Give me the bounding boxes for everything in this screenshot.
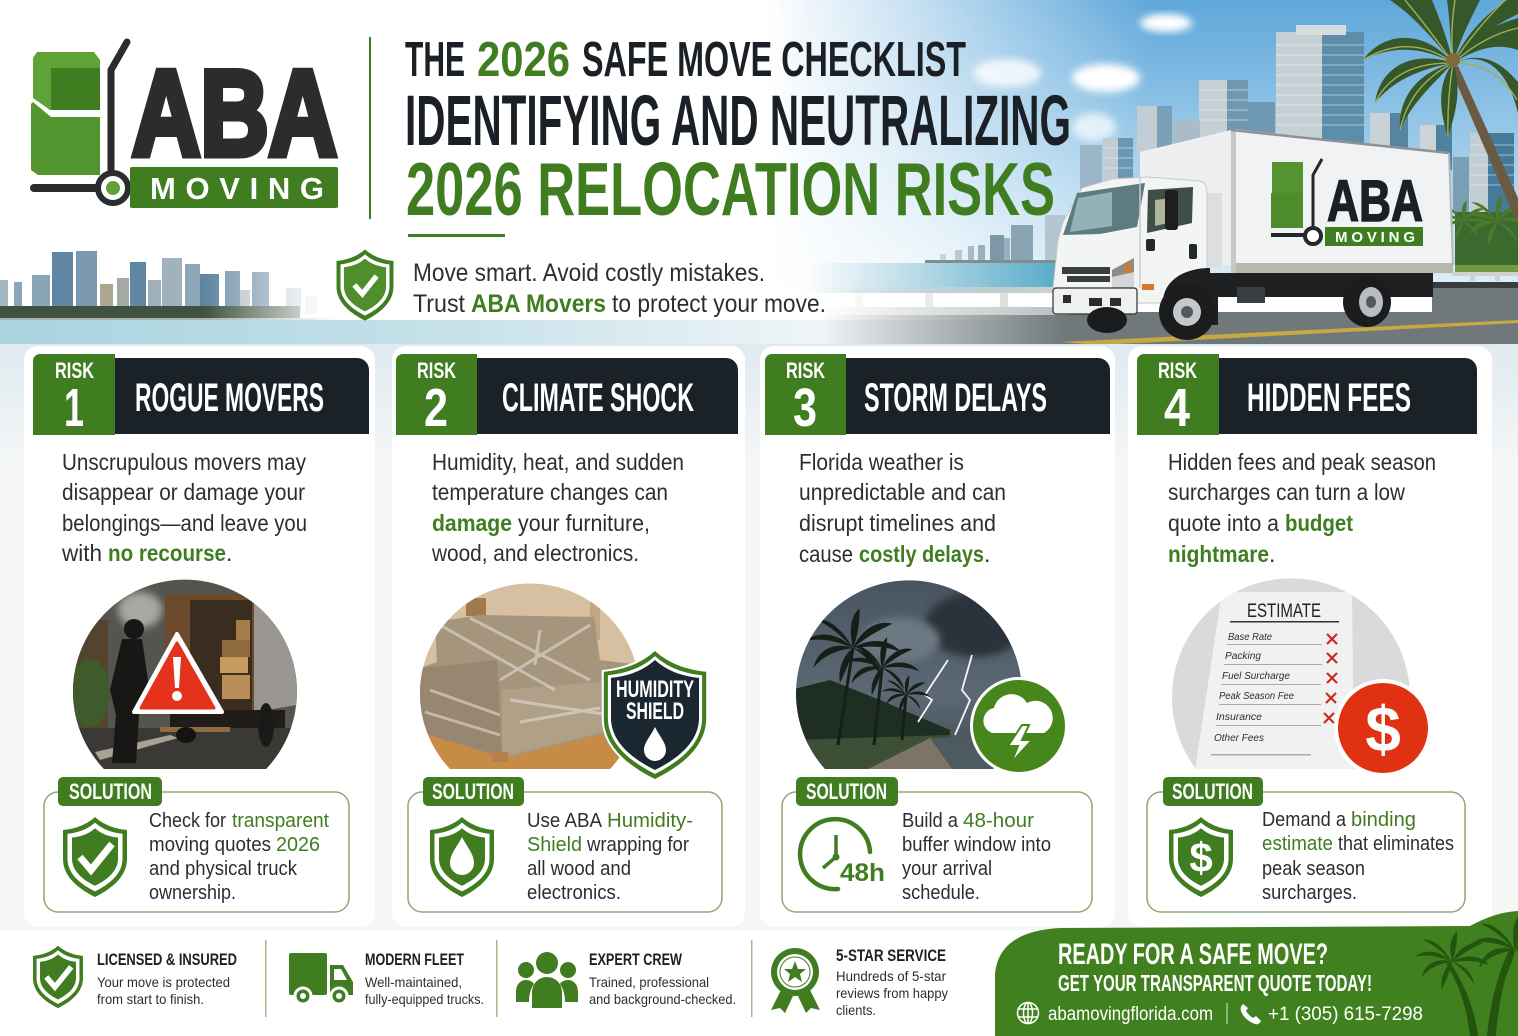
risk 2 description: damage [432,510,512,536]
icon: 48h clock: 48h [840,859,885,887]
risk 2 header bar: RISK [417,358,456,383]
risk 2 solution [408,777,722,912]
logo: green boxes [31,52,100,175]
moving truck with ABA logo [1053,129,1453,340]
title line 1: THE [405,33,465,87]
truck logo [1271,159,1423,246]
risk 3 description: disrupt timelines and [799,510,996,536]
icon: 48h clock [800,819,885,889]
trust bar dividers [265,940,752,1017]
risk 2 solution: electronics. [527,882,621,904]
trust item: five star service: Hundreds of 5-star [836,968,946,984]
risk 4 solution: that eliminates [1338,833,1454,855]
risk 3 description: costly delays [859,541,984,567]
risk 4 header bar [1137,354,1477,438]
risk 1 header bar: RISK [55,358,94,383]
image: estimate sheet with hidden fees [1165,575,1432,777]
risk 4 description: . [1269,541,1275,567]
risk 1 solution: Check for [149,810,226,832]
tagline text: to protect your move. [612,290,826,318]
phone number: +1 (305) 615-7298 [1268,1004,1423,1025]
risk 1 header bar [33,354,369,438]
risk 1 description: no recourse [108,540,226,566]
logo: hand truck [34,42,128,203]
contact divider [1226,1003,1228,1024]
icon: water drop shield [430,817,494,897]
risk 4 description: nightmare [1168,541,1269,567]
image: estimate sheet with hidden fees: Insurance [1216,711,1262,723]
icon: storm cloud badge [970,677,1068,775]
risk 1 description: belongings—and leave you [62,510,307,536]
risk 4 header bar: RISK [1158,358,1197,383]
humidity shield badge: HUMIDITY [616,676,694,703]
logo: ABA wordmark: ABA [132,45,337,181]
icon: check shield [63,817,127,897]
trust item: five star service: clients. [836,1002,876,1018]
risk 2 description: your furniture, [518,510,650,536]
risk 2 solution: Shield [527,834,582,856]
image: estimate sheet with hidden fees: Peak Season Fee [1219,690,1294,702]
panel: risk 2 climate shock [392,346,745,927]
risk 2 solution: wrapping for [586,834,689,856]
risk 4 description: surcharges can turn a low [1168,479,1405,505]
risk 1 description [61,449,307,566]
risk 1 description: Unscrupulous movers may [62,449,306,475]
risk 3 solution: schedule. [902,882,980,904]
road, guard rail and right side scenery [820,195,1518,345]
trust item: five star service: reviews from happy [836,985,948,1001]
risk 4 header bar: HIDDEN FEES [1247,376,1411,420]
risk 1 solution: 2026 [276,834,320,856]
trust item: expert crew [516,950,736,1008]
risk 3 description: unpredictable and can [799,479,1006,505]
ABA Moving logo [31,42,338,208]
footer white band [0,930,1518,1036]
risk 2 header bar [396,354,738,438]
icon: check shield [337,249,393,321]
risk 3 solution: buffer window into [902,834,1051,856]
image: estimate sheet with hidden fees: Fuel Surcharge [1222,670,1290,682]
risk 4 description: budget [1285,510,1353,536]
trust item: five star service: 5-STAR SERVICE [836,946,946,965]
title block [405,33,1071,237]
trust item: licensed and insured: LICENSED & INSURED [97,950,237,969]
risk 4 solution: estimate [1262,833,1333,855]
risk 2 solution: Use ABA [527,810,603,832]
trust item: modern fleet: Well-maintained, [365,974,462,990]
truck cargo box [1140,129,1453,303]
risk 3 header bar: STORM DELAYS [864,376,1047,420]
risk 3 description: cause [799,541,853,567]
trust item: licensed and insured [33,946,237,1008]
risk 3 description: . [984,541,990,567]
truck cab [1053,177,1218,325]
tagline with shield icon [337,249,826,321]
icon: warning triangle [134,634,222,712]
icon: globe [1018,1002,1038,1024]
image: movers truck at night with warning [73,580,297,769]
title line 1 [405,33,966,87]
image: wrapped sofa [420,584,636,769]
trust bar [33,946,948,1018]
call to action panel [995,911,1518,1036]
tagline text [413,259,826,318]
risk 1 solution: SOLUTION [69,779,152,804]
icon: dollar shield: $ [1189,834,1213,881]
panel: risk 3 storm delays [760,346,1115,927]
title line 3: 2026 RELOCATION RISKS [406,147,1055,231]
tagline text: Trust [413,290,465,318]
risk 2 solution: Humidity- [607,810,693,832]
title underline [408,234,505,237]
risk 3 header bar: 3 [793,378,817,438]
risk 2 description [431,449,684,566]
left skyline over the water [0,251,340,322]
truck logo: ABA [1327,169,1423,234]
trust item: expert crew: and background-checked. [589,991,736,1007]
risk 2 solution: all wood and [527,858,631,880]
risk 4 description [1168,449,1436,567]
risk 3 solution: 48-hour [963,810,1034,832]
image: estimate sheet with hidden fees: ESTIMATE [1247,601,1321,622]
risk 4 solution: binding [1351,809,1416,831]
risk 3 solution: Build a [902,810,959,832]
trust item: modern fleet: fully-equipped trucks. [365,991,484,1007]
water strip along the header bottom [0,320,1518,344]
risk 2 description: temperature changes can [432,479,668,505]
risk 2 header bar: CLIMATE SHOCK [502,376,694,420]
image: hurricane storm and palms [790,578,1030,773]
risk 3 description [799,449,1006,567]
risk 4 solution: peak season [1262,858,1365,880]
icon: red dollar badge [1334,679,1432,777]
man silhouette [110,619,148,763]
image: estimate sheet with hidden fees: Base Rate [1228,631,1272,643]
trust item: modern fleet: MODERN FLEET [365,950,464,969]
trust item: expert crew: Trained, professional [589,974,709,990]
risk 4 solution: Demand a [1262,809,1347,831]
risk 3 solution: your arrival [902,858,992,880]
risk 3 description: Florida weather is [799,449,964,475]
logo: MOVING banner: MOVING [150,171,324,206]
palm silhouettes [1415,914,1518,1036]
trust item: licensed and insured: Your move is protected [97,974,230,990]
panel: risk 1 rogue movers [24,346,375,927]
risk 1 description: . [226,540,232,566]
risk 4 solution: SOLUTION [1172,779,1253,804]
risk 1 solution: and physical truck [149,858,298,880]
website: abamovingflorida.com [1048,1004,1213,1025]
risk 1 header bar: 1 [64,378,84,438]
risk 1 header bar: ROGUE MOVERS [135,376,324,420]
risk 4 solution [1147,777,1465,912]
risk 1 solution: ownership. [149,882,236,904]
humidity shield badge: SHIELD [626,698,684,725]
header photo: sky, clouds and Miami skyline [787,0,1518,293]
icon: phone [1241,1004,1261,1024]
title line 1: 2026 [477,33,570,87]
risk 1 solution: transparent [232,810,329,832]
risk 4 header bar: 4 [1164,378,1190,438]
risk 2 solution: SOLUTION [432,779,514,804]
humidity shield badge [602,648,708,782]
image: estimate sheet with hidden fees: Other Fees [1214,732,1265,744]
tagline text: Move smart. Avoid costly mistakes. [413,259,765,287]
title line 1: SAFE MOVE CHECKLIST [582,33,966,87]
risk 2 description: wood, and electronics. [431,540,639,566]
truck wheels [1087,277,1391,340]
trust item: modern fleet [289,950,484,1007]
risk 3 header bar [765,354,1110,438]
icon: red dollar badge: $ [1365,693,1401,765]
panel: risk 4 hidden fees [1128,346,1492,927]
risk section background [0,344,1518,930]
risk 4 description: quote into a [1168,510,1279,536]
risk 4 description: Hidden fees and peak season [1168,449,1436,475]
risk 4 solution: surcharges. [1262,882,1357,904]
tagline text: ABA Movers [471,290,606,318]
palm tree [1363,0,1518,218]
call to action heading: READY FOR A SAFE MOVE? [1058,938,1328,971]
image: estimate sheet with hidden fees: Packing [1225,650,1261,662]
risk 3 solution: SOLUTION [806,779,887,804]
risk 1 description: disappear or damage your [62,479,305,505]
risk 3 solution [782,777,1092,912]
trust item: five star service [771,946,948,1018]
truck logo: MOVING [1335,229,1415,246]
risk 2 header bar: 2 [424,378,448,438]
trust item: expert crew: EXPERT CREW [589,950,683,969]
risk 2 description: Humidity, heat, and sudden [432,449,684,475]
risk 3 header bar: RISK [786,358,825,383]
icon: dollar shield [1169,817,1233,897]
trust item: licensed and insured: from start to finish. [97,991,204,1007]
risk 1 description: with [61,540,102,566]
risk 1 solution: moving quotes [149,834,271,856]
header divider [369,37,371,219]
risk 1 solution [44,777,349,912]
